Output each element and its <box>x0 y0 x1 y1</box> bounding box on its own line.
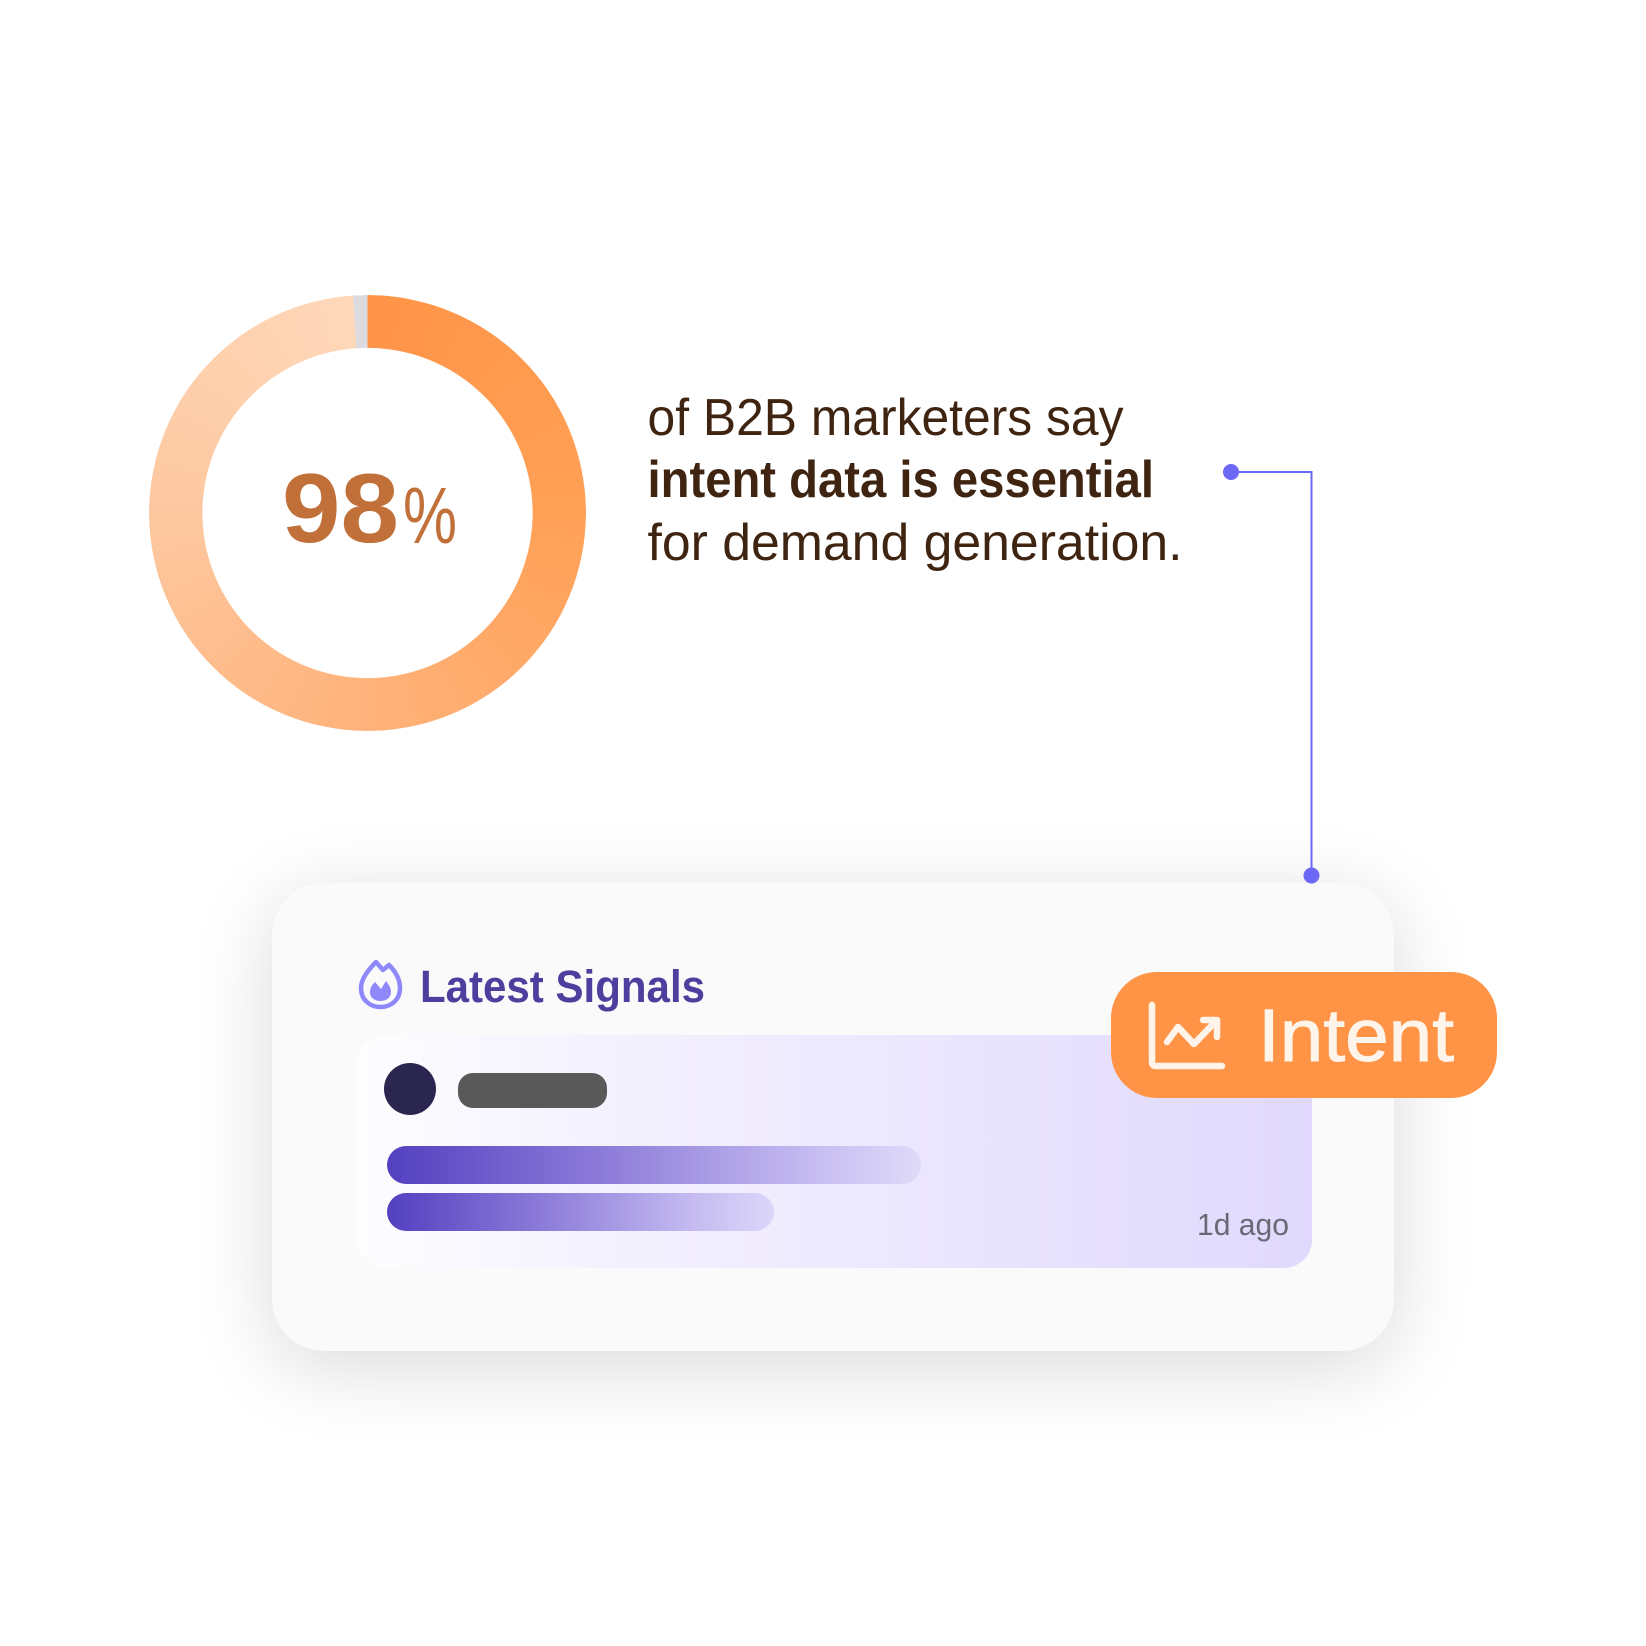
heading: Latest Signals: Latest Signals <box>420 961 705 1012</box>
badge label: Intent: Intent <box>1258 994 1454 1077</box>
statement text <box>648 389 1182 572</box>
timestamp: 1d ago <box>1197 1207 1289 1242</box>
icon: trend chart <box>1152 1005 1222 1066</box>
avatar circle <box>384 1063 436 1115</box>
donut chart: 98 percent ring <box>148 295 586 731</box>
signal row with lavender gradient <box>357 1035 1312 1268</box>
signal placeholder bar short <box>387 1193 774 1231</box>
name placeholder bar <box>458 1073 607 1108</box>
connector line with dots <box>1223 464 1320 884</box>
big statistic 98%: % <box>403 471 457 560</box>
panel: latest signals card <box>272 883 1394 1351</box>
big statistic 98% <box>282 453 457 563</box>
big statistic 98%: 98 <box>282 453 399 563</box>
statement text: of B2B marketers say <box>648 389 1124 447</box>
intent badge background <box>1111 972 1497 1098</box>
signal placeholder bar long <box>387 1146 921 1184</box>
icon: flame <box>361 962 400 1007</box>
statement text: intent data is essential <box>648 451 1154 509</box>
statement text: for demand generation. <box>648 514 1182 572</box>
